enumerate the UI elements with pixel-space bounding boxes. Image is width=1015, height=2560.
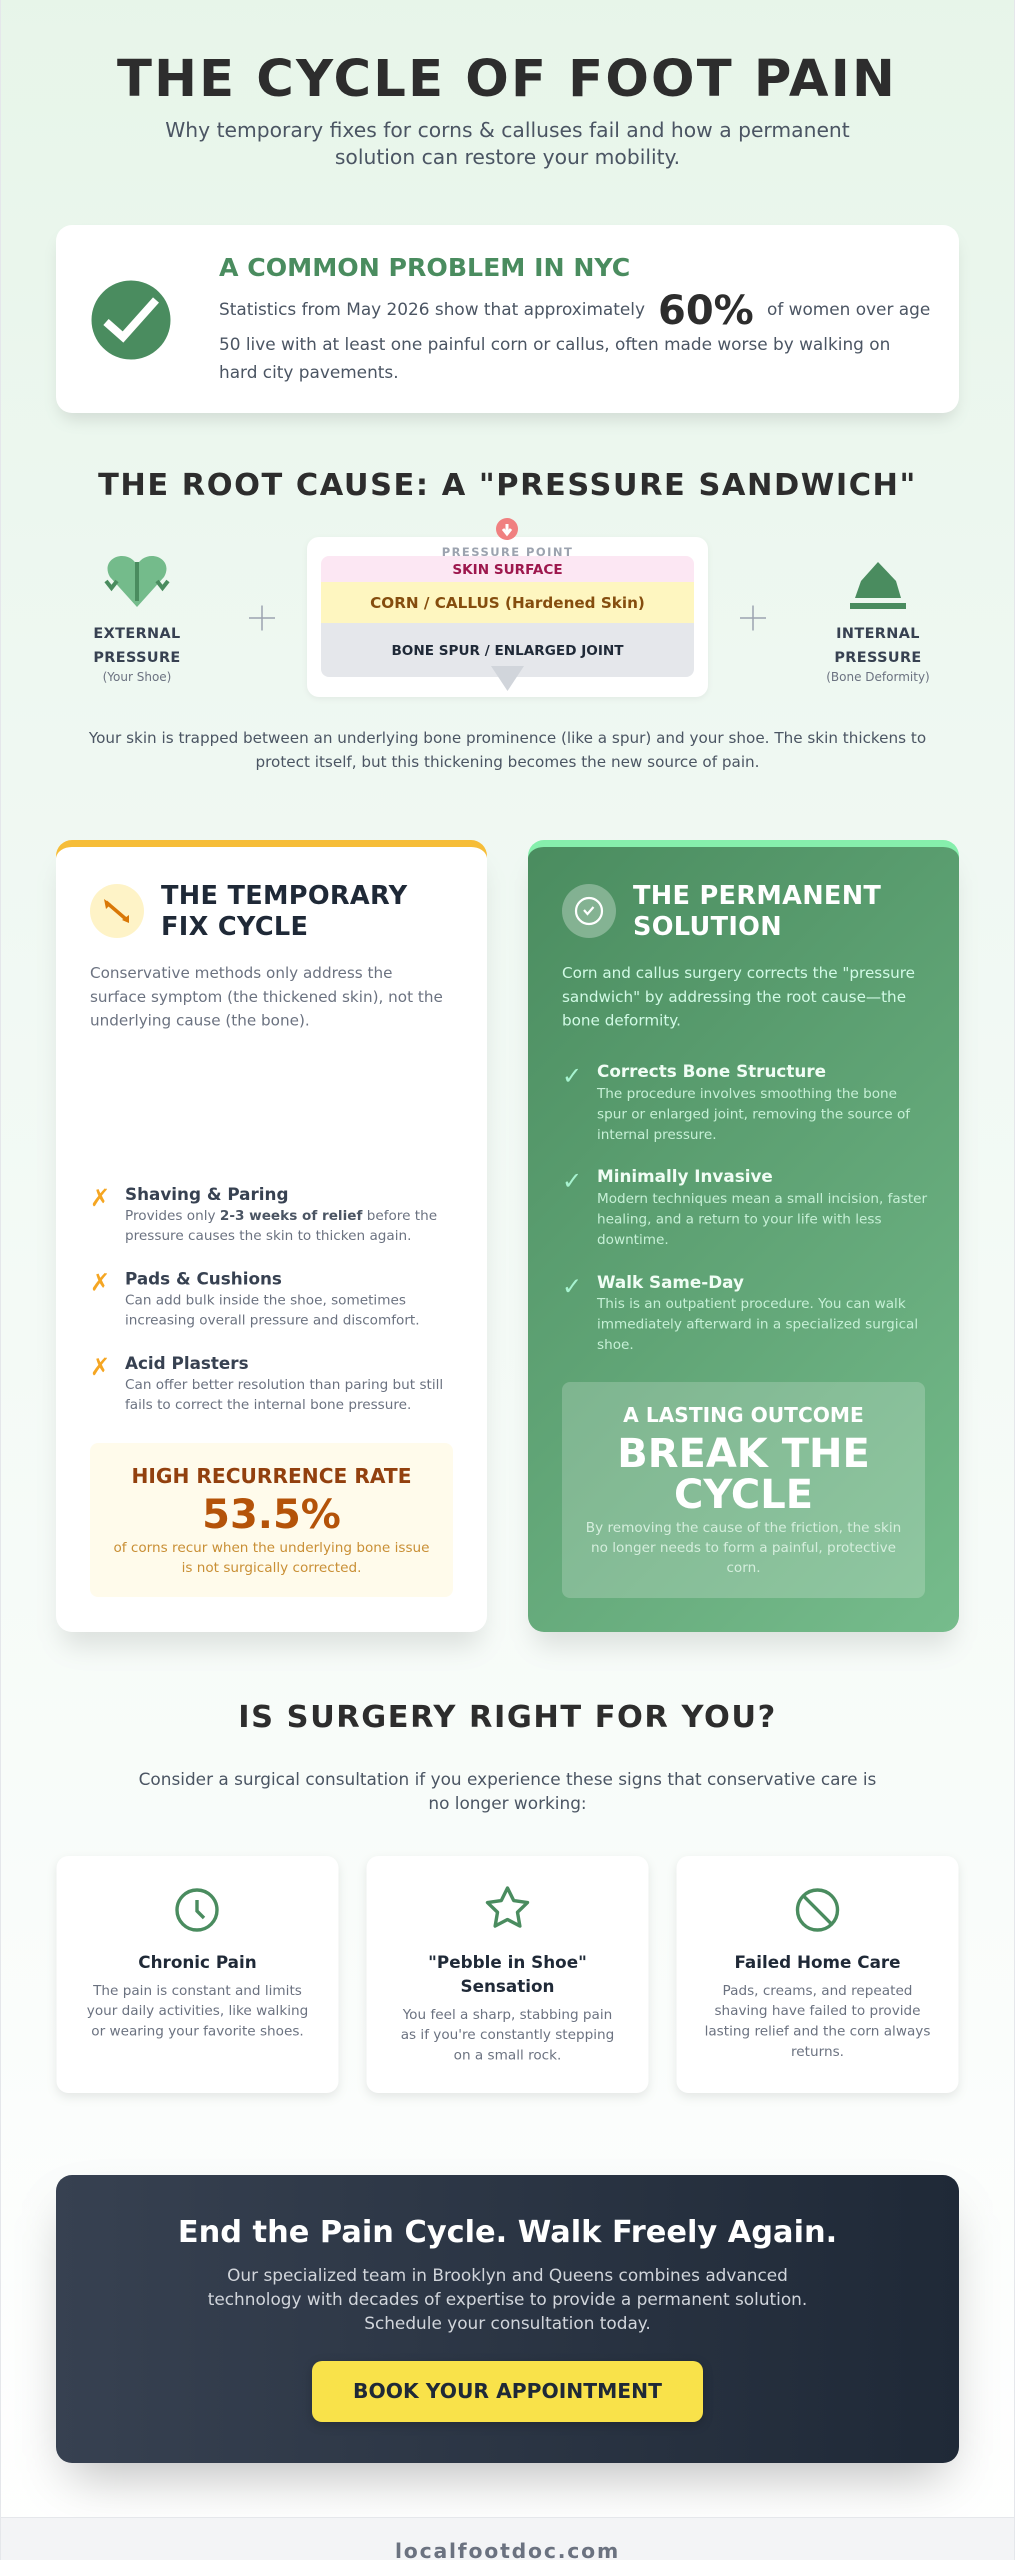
temporary intro: [90, 964, 443, 1030]
item: walk same-day: shoe.: [597, 1337, 634, 1353]
callout: recurrence rate: [90, 1443, 453, 1597]
cta text: [208, 2265, 807, 2333]
surgery intro text: Consider a surgical consultation if you experience these signs that conservative care is: [139, 1769, 876, 1789]
item: pads and cushions: Can add bulk inside the shoe, sometimes: [125, 1292, 406, 1308]
problem statistic text: Statistics from May 2026 show that approximately: [219, 299, 645, 319]
pressure point label: PRESSURE POINT: [442, 545, 573, 559]
item: shaving and paring: Provides only 2-3 weeks of relief before the: [125, 1208, 437, 1224]
icon: check badge: [92, 280, 170, 360]
item: corrects bone structure: spur or enlarged joint, removing the source of: [597, 1106, 911, 1122]
permanent intro: bone deformity.: [562, 1012, 681, 1030]
failed care text: shaving have failed to provide: [714, 2003, 921, 2019]
item: minimally invasive: [562, 1166, 928, 1248]
skin layer: SKIN SURFACE: [452, 562, 563, 578]
external pressure: PRESSURE: [93, 650, 181, 666]
item: acid plasters: fails to correct the internal bone pressure.: [125, 1397, 411, 1413]
item: acid plasters: Acid Plasters: [125, 1353, 249, 1373]
icon: bone deformity: [850, 562, 906, 609]
item: pads and cushions: [90, 1268, 420, 1328]
internal label: INTERNAL: [836, 626, 920, 642]
temporary heading: THE TEMPORARY: [161, 881, 408, 911]
item: pads and cushions: increasing overall pressure and discomfort.: [125, 1312, 420, 1328]
problem statistic text: of women over age: [767, 299, 930, 319]
icon: pressure arrow: [496, 518, 518, 540]
chronic pain text: or wearing your favorite shoes.: [91, 2024, 304, 2040]
cta text: technology with decades of expertise to provide a permanent solution.: [208, 2289, 807, 2309]
temporary intro: underlying cause (the bone).: [90, 1012, 310, 1030]
plus sign right: [740, 606, 766, 630]
permanent intro: sandwich" by addressing the root cause—the: [562, 988, 906, 1006]
internal pressure: PRESSURE: [834, 650, 922, 666]
item: shaving and paring: pressure causes the skin to thicken again.: [125, 1228, 411, 1244]
card: failed home care: [676, 1856, 958, 2093]
explanation text: protect itself, but this thickening becomes the new source of pain.: [255, 753, 760, 771]
chronic pain text: The pain is constant and limits: [92, 1983, 302, 1999]
item: corrects bone structure: Corrects Bone Structure: [597, 1061, 826, 1081]
failed care text: lasting relief and the corn always: [705, 2024, 930, 2040]
callout: lasting outcome: [562, 1382, 925, 1598]
item: acid plasters: Can offer better resolution than paring but still: [125, 1377, 443, 1393]
item: pads and cushions: Pads & Cushions: [125, 1268, 282, 1288]
chronic pain title: Chronic Pain: [138, 1952, 257, 1972]
temporary intro: Conservative methods only address the: [90, 964, 392, 982]
icon: clock: [177, 1890, 217, 1930]
button: book appointment: [312, 2361, 703, 2422]
problem statistic text: hard city pavements.: [219, 362, 399, 382]
cta text: Our specialized team in Brooklyn and Queens combines advanced: [227, 2265, 788, 2285]
callout: recurrence rate: 53.5%: [202, 1492, 341, 1538]
permanent intro: [562, 964, 915, 1030]
failed care text: returns.: [791, 2044, 844, 2060]
callout: recurrence rate: of corns recur when the underlying bone issue: [113, 1540, 430, 1556]
icon: temporary fix: [90, 884, 144, 938]
item: corrects bone structure: The procedure involves smoothing the bone: [596, 1086, 897, 1102]
failed care title: Failed Home Care: [734, 1952, 901, 1972]
temporary intro: surface symptom (the thickened skin), not the: [90, 988, 443, 1006]
pebble title: Sensation: [461, 1976, 554, 1996]
external label: EXTERNAL: [93, 626, 181, 642]
cta heading: End the Pain Cycle. Walk Freely Again.: [178, 2215, 837, 2250]
cta text: Schedule your consultation today.: [364, 2313, 651, 2333]
permanent heading: SOLUTION: [633, 912, 782, 942]
chronic pain text: your daily activities, like walking: [87, 2003, 308, 2019]
card: pebble in shoe: [366, 1856, 648, 2093]
heading: root cause: THE ROOT CAUSE: A "PRESSURE SANDWICH": [98, 468, 917, 503]
explanation text: [88, 729, 926, 771]
internal pressure: [826, 562, 930, 684]
item: shaving and paring: ✗: [90, 1184, 110, 1212]
panel: temporary fix cycle: [56, 840, 487, 1647]
callout: lasting outcome: BREAK THE: [617, 1431, 870, 1477]
icon: check circle: [562, 884, 616, 938]
bone spur triangle: [491, 666, 524, 691]
skin layer: [321, 556, 694, 582]
item: minimally invasive: healing, and a return to your life with less: [597, 1212, 882, 1228]
item: corrects bone structure: ✓: [562, 1062, 582, 1090]
card: chronic pain: [56, 1856, 338, 2093]
callout: lasting outcome: corn.: [726, 1560, 761, 1576]
panel: common problem in NYC: [56, 225, 959, 420]
pebble text: as if you're constantly stepping: [401, 2027, 614, 2043]
footer: [1, 2517, 1014, 2560]
surgery intro text: no longer working:: [428, 1793, 587, 1813]
callout: lasting outcome: CYCLE: [674, 1472, 813, 1518]
item: corrects bone structure: [562, 1061, 911, 1143]
heading: is surgery right for you: IS SURGERY RIGHT FOR YOU?: [238, 1700, 777, 1735]
button: book appointment: BOOK YOUR APPOINTMENT: [353, 2379, 662, 2403]
item: walk same-day: Walk Same-Day: [597, 1272, 744, 1292]
pebble text: You feel a sharp, stabbing pain: [402, 2007, 612, 2023]
explanation text: Your skin is trapped between an underlying bone prominence (like a spur) and your shoe. The skin thickens to: [88, 729, 926, 747]
panel: permanent solution: [528, 840, 959, 1647]
external pressure: (Your Shoe): [103, 670, 171, 684]
item: walk same-day: This is an outpatient procedure. You can walk: [596, 1296, 906, 1312]
bone layer: BONE SPUR / ENLARGED JOINT: [391, 643, 624, 659]
corn layer: CORN / CALLUS (Hardened Skin): [370, 594, 645, 612]
problem statistic text: [219, 288, 930, 382]
failed care text: [705, 1983, 930, 2060]
failed care text: Pads, creams, and repeated: [723, 1983, 912, 1999]
callout: lasting outcome: no longer needs to form a painful, protective: [591, 1540, 896, 1556]
bone layer: [321, 623, 694, 677]
pebble text: on a small rock.: [454, 2048, 561, 2064]
surgery intro text: [139, 1769, 876, 1813]
icon: ban: [798, 1890, 838, 1930]
item: shaving and paring: [90, 1184, 437, 1244]
problem heading: A COMMON PROBLEM IN NYC: [219, 253, 630, 282]
callout: recurrence rate: is not surgically corrected.: [182, 1560, 361, 1576]
callout: lasting outcome: By removing the cause of the friction, the skin: [586, 1520, 901, 1536]
callout: recurrence rate: HIGH RECURRENCE RATE: [131, 1464, 412, 1488]
problem statistic text: 50 live with at least one painful corn or callus, often made worse by walking on: [219, 334, 890, 354]
item: corrects bone structure: internal pressure.: [597, 1127, 717, 1143]
item: minimally invasive: Modern techniques mean a small incision, faster: [597, 1191, 928, 1207]
item: pads and cushions: ✗: [90, 1268, 110, 1296]
title: THE CYCLE OF FOOT PAIN: [117, 49, 897, 109]
temporary heading: [161, 881, 408, 942]
internal pressure: (Bone Deformity): [826, 670, 930, 684]
item: acid plasters: ✗: [90, 1353, 110, 1381]
item: minimally invasive: downtime.: [597, 1232, 669, 1248]
external pressure: [93, 556, 181, 684]
callout: lasting outcome: A LASTING OUTCOME: [623, 1403, 864, 1427]
pebble title: [428, 1952, 587, 1996]
item: walk same-day: immediately afterward in a specialized surgical: [597, 1316, 918, 1332]
item: minimally invasive: Minimally Invasive: [597, 1166, 773, 1186]
temporary heading: FIX CYCLE: [161, 912, 308, 942]
permanent heading: THE PERMANENT: [633, 881, 881, 911]
subtitle: Why temporary fixes for corns & calluses fail and how a permanent: [165, 118, 850, 142]
icon: star: [488, 1888, 528, 1926]
permanent intro: Corn and callus surgery corrects the "pressure: [562, 964, 915, 982]
diagram: pressure sandwich: [307, 518, 708, 697]
corn layer: [321, 582, 694, 623]
pebble text: [401, 2007, 614, 2064]
pebble title: "Pebble in Shoe": [428, 1952, 587, 1972]
panel: call to action: [56, 2175, 959, 2476]
plus sign left: [249, 606, 275, 630]
item: walk same-day: [562, 1272, 918, 1353]
item: acid plasters: [90, 1353, 443, 1413]
permanent heading: [633, 881, 881, 942]
subtitle: [165, 118, 850, 169]
chronic pain text: [87, 1983, 308, 2040]
item: shaving and paring: Shaving & Paring: [125, 1184, 288, 1204]
problem statistic text: 60%: [658, 288, 754, 334]
item: walk same-day: ✓: [562, 1272, 582, 1300]
subtitle: solution can restore your mobility.: [335, 145, 680, 169]
item: minimally invasive: ✓: [562, 1167, 582, 1195]
icon: shoe heart: [106, 556, 168, 607]
